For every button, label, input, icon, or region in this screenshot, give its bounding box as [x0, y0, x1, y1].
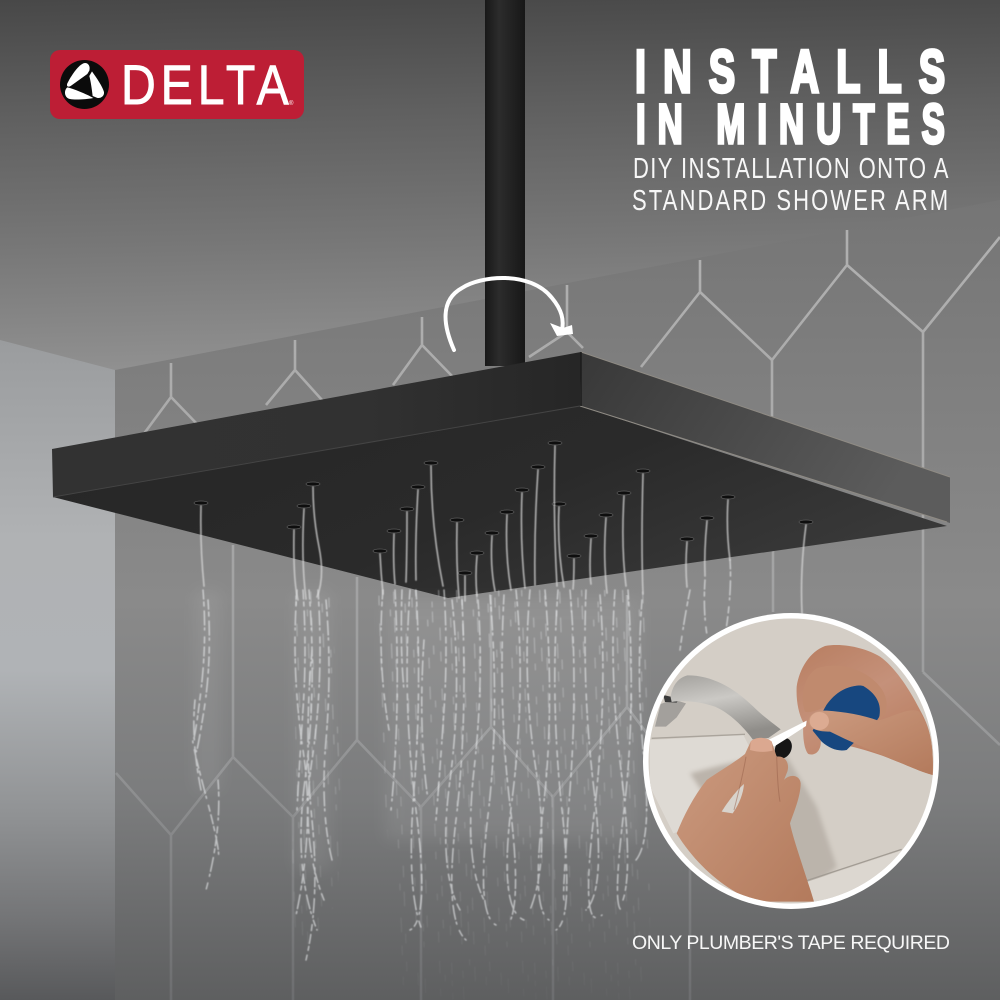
brand logo	[50, 50, 304, 119]
logo emblem circle	[60, 60, 109, 109]
escutcheon	[655, 699, 686, 727]
water glow behind falling spray	[195, 590, 640, 870]
red badge	[50, 50, 304, 119]
water streams: solid upper jets	[201, 446, 806, 613]
caption: ONLY PLUMBER'S TAPE REQUIRED	[632, 932, 950, 954]
background: bathroom ceiling	[0, 0, 1000, 380]
wall shadow	[690, 757, 837, 893]
shower arm pipe	[671, 675, 781, 739]
lower-right tile	[808, 851, 902, 902]
registered mark: ®	[289, 100, 294, 107]
water streams: breaking lower droplets	[193, 560, 730, 960]
gap between fingers	[722, 784, 744, 813]
rotation arrow	[446, 278, 573, 350]
finger creases	[734, 757, 780, 810]
headline line 2: IN MINUTES	[636, 93, 945, 155]
inset photo: applying plumber's tape	[640, 610, 940, 910]
subheading line 2: STANDARD SHOWER ARM	[632, 185, 948, 217]
headline line 1: INSTALLS	[635, 38, 945, 105]
emblem petals	[65, 63, 104, 99]
underside face	[53, 406, 947, 598]
right hand back	[797, 645, 933, 775]
tile lines	[652, 734, 745, 738]
left hand	[677, 738, 814, 902]
shower arm stem	[485, 0, 525, 366]
blue tape roll	[813, 685, 883, 750]
left side face	[52, 352, 581, 497]
DELTA wordmark: DELTA	[121, 55, 289, 117]
headline	[632, 38, 949, 217]
background: left wall	[0, 340, 115, 1000]
photo wall	[640, 610, 940, 910]
nozzles	[194, 441, 813, 575]
left thumb nail	[750, 738, 773, 752]
background: hex tile grout lines	[116, 230, 1000, 1000]
subheading line 1: DIY INSTALLATION ONTO A	[633, 153, 949, 185]
index finger fold	[812, 678, 884, 717]
thumb	[808, 710, 933, 775]
shower arm threaded end	[774, 738, 792, 758]
lighter lower-left tile glow	[650, 735, 748, 833]
square shower head	[52, 352, 950, 598]
head edge highlights	[580, 352, 950, 522]
background: back wall	[115, 200, 1000, 1000]
water spray texture	[292, 590, 650, 910]
right side face	[580, 352, 950, 523]
thumb nail	[810, 712, 829, 730]
white circle frame	[643, 613, 939, 909]
white tape strip	[768, 721, 807, 747]
